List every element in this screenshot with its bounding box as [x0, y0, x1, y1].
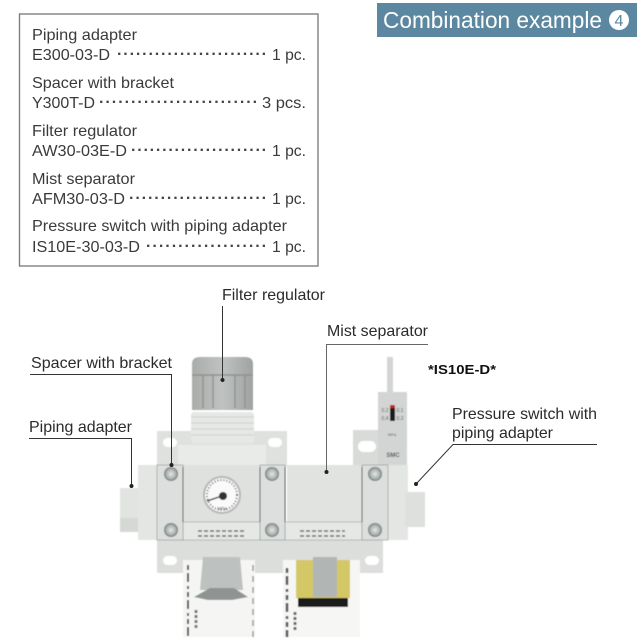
- product photo: modular air unit: MPa: [217, 506, 227, 511]
- parts row: mist separator: AFM30-03-D: [32, 191, 125, 208]
- label: pressure switch with piping adapter: Pressure switch with: [452, 406, 597, 423]
- parts row: spacer with bracket: Spacer with bracket: [32, 75, 175, 92]
- label: piping adapter: Piping adapter: [29, 419, 133, 436]
- label: piping adapter: [29, 419, 134, 488]
- heading: combination example: [377, 3, 637, 37]
- mist separator body: [287, 465, 362, 522]
- parts row: pressure switch with piping adapter: [32, 218, 306, 256]
- parts row: pressure switch with piping adapter: ···················: [146, 238, 267, 255]
- left piping adapter: [120, 488, 150, 532]
- product photo: modular air unit: MPa: [388, 432, 397, 437]
- note: model code: *IS10E-D*: [428, 362, 497, 377]
- product photo: modular air unit: 0.4: [382, 416, 389, 422]
- parts row: filter regulator: [32, 123, 306, 160]
- regulator knob: [192, 357, 253, 410]
- filter bowl left: [183, 560, 255, 637]
- parts row: pressure switch with piping adapter: IS10E-30-03-D: [32, 239, 140, 256]
- parts row: piping adapter: E300-03-D: [32, 47, 110, 64]
- label: filter regulator: Filter regulator: [222, 287, 326, 304]
- product photo: modular air unit: 0.2: [382, 408, 389, 414]
- parts row: piping adapter: [32, 27, 306, 64]
- parts row: piping adapter: Piping adapter: [32, 27, 138, 44]
- right pressure switch adapter: [388, 465, 408, 540]
- parts row: mist separator: ······················: [129, 190, 267, 207]
- parts row: spacer with bracket: 3 pcs.: [262, 95, 306, 112]
- parts row: filter regulator: 1 pc.: [272, 143, 306, 160]
- parts row: spacer with bracket: Y300T-D: [32, 95, 95, 112]
- parts row: pressure switch with piping adapter: 1 pc.: [272, 239, 306, 256]
- parts row: piping adapter: 1 pc.: [272, 47, 306, 64]
- panel: parts list: [20, 14, 318, 266]
- parts row: spacer with bracket: [32, 75, 306, 112]
- mist separator bowl right: [283, 560, 360, 637]
- threaded collar: [191, 412, 254, 443]
- parts row: piping adapter: ························: [117, 46, 267, 63]
- parts row: spacer with bracket: ·························: [99, 94, 258, 111]
- lower mounting brackets: [157, 540, 383, 573]
- parts row: mist separator: [32, 171, 306, 208]
- pressure sensor: [387, 357, 393, 393]
- heading: combination example: Combination example: [383, 7, 602, 33]
- label: filter regulator: [220, 287, 326, 382]
- label: pressure switch with piping adapter: [414, 406, 597, 486]
- regulator body with gauge: [183, 465, 260, 522]
- product photo: modular air unit: 0.1: [397, 408, 404, 414]
- upper mounting brackets: [157, 431, 287, 467]
- parts row: filter regulator: ······················: [131, 142, 267, 159]
- spacers with screws: [157, 465, 183, 540]
- heading: combination example: 4: [615, 13, 624, 30]
- label: pressure switch with piping adapter: piping adapter: [452, 425, 554, 442]
- parts row: mist separator: Mist separator: [32, 171, 136, 188]
- parts row: pressure switch with piping adapter: Pressure switch with piping adapter: [32, 218, 288, 235]
- label: spacer with bracket: Spacer with bracket: [31, 355, 173, 372]
- product photo: modular air unit: [120, 357, 425, 637]
- label: mist separator: Mist separator: [327, 323, 429, 340]
- product photo: modular air unit: 0.3: [397, 416, 404, 422]
- parts row: filter regulator: AW30-03E-D: [32, 143, 127, 160]
- product photo: modular air unit: SMC: [386, 453, 400, 459]
- parts row: mist separator: 1 pc.: [272, 191, 306, 208]
- label: spacer with bracket: [30, 355, 174, 467]
- parts row: filter regulator: Filter regulator: [32, 123, 138, 140]
- label: mist separator: [324, 323, 429, 474]
